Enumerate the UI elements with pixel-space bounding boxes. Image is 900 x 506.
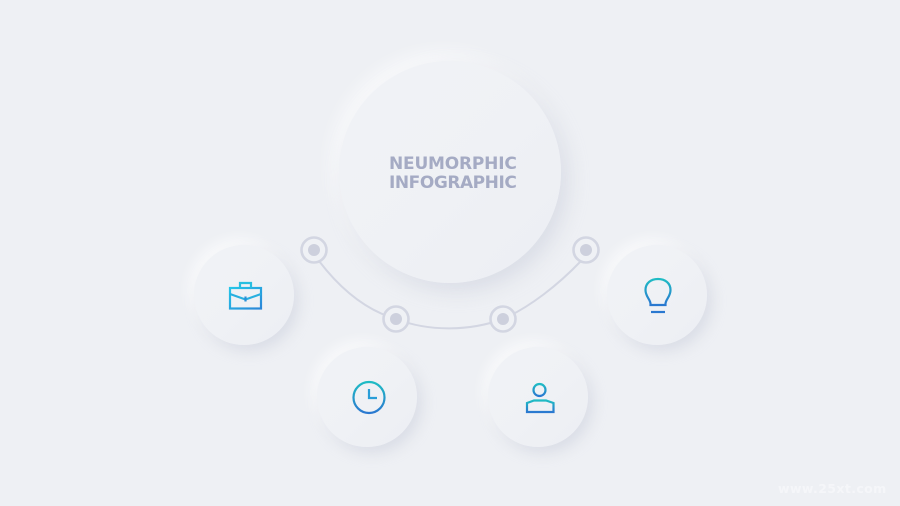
panel: briefcase circle [194, 245, 294, 345]
icon: clock [354, 382, 384, 413]
central circle panel [339, 61, 561, 283]
title: NEUMORPHIC [389, 154, 517, 174]
icon: light bulb [646, 279, 670, 312]
icon: person [527, 384, 554, 412]
watermark: www.25xt.com [778, 481, 887, 496]
panel: clock circle [317, 347, 417, 447]
panel: person circle [488, 347, 588, 447]
panel: light bulb circle [607, 245, 707, 345]
title [389, 154, 517, 192]
title: INFOGRAPHIC [389, 172, 516, 192]
icon: briefcase [230, 283, 261, 308]
